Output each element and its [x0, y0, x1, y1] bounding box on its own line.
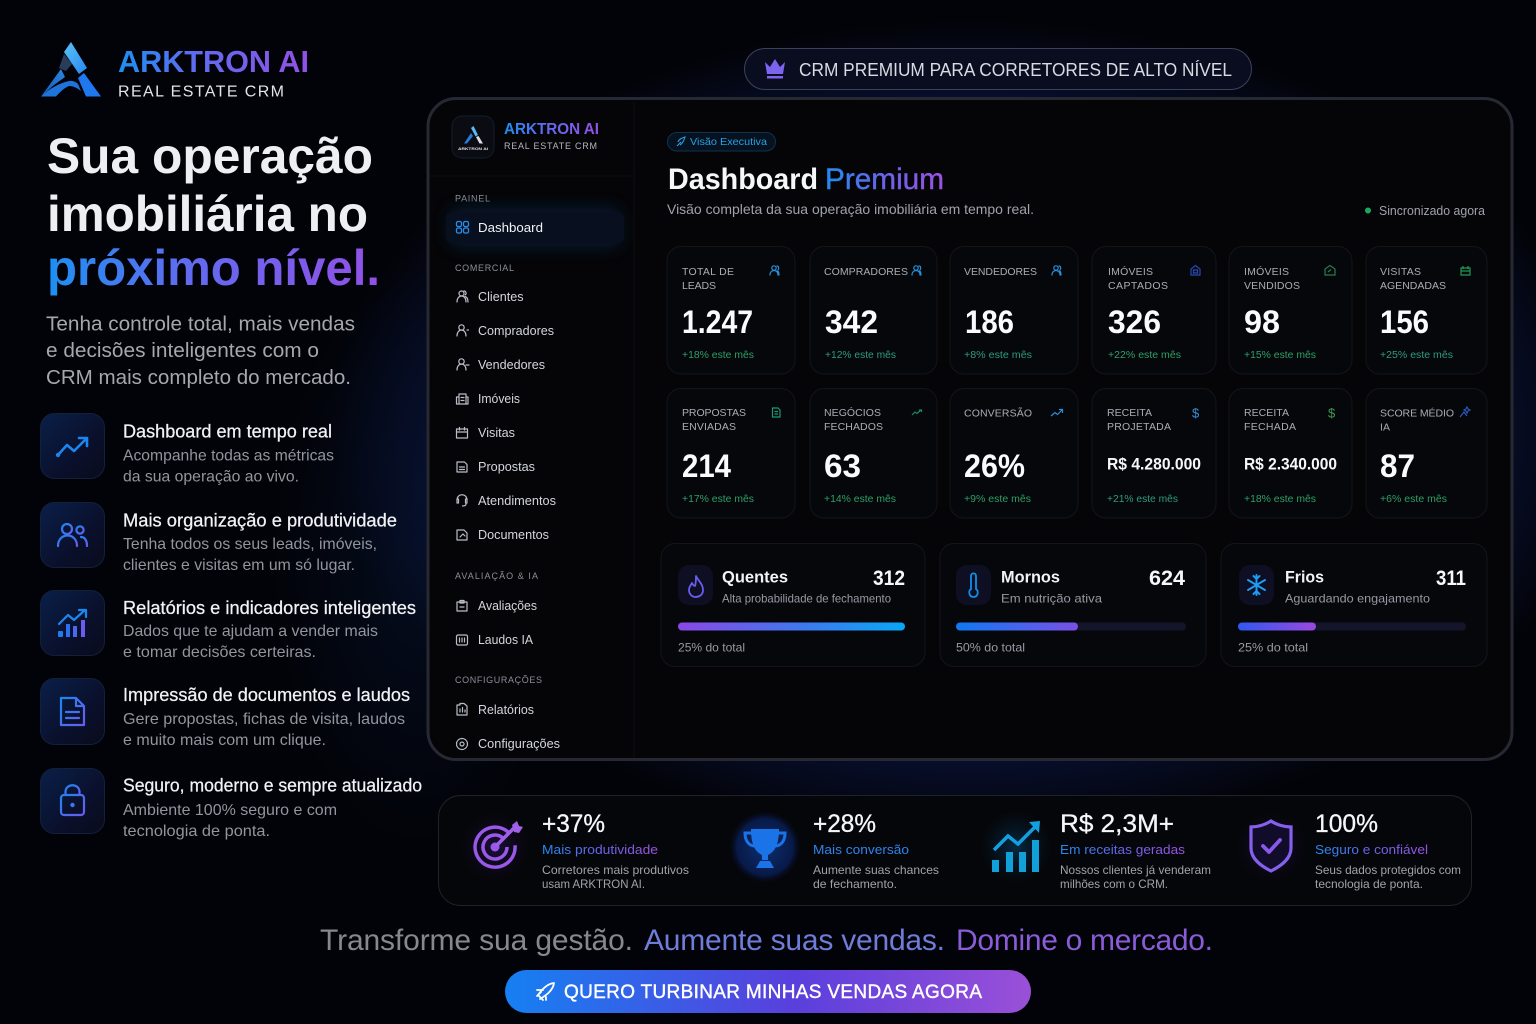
feature: security: tecnologia de ponta. [123, 823, 270, 840]
card: mornos: Mornos [1001, 568, 1060, 586]
section: painel: PAINEL [455, 194, 490, 204]
stat: conversao: de fechamento. [813, 877, 897, 891]
main header [667, 132, 1485, 218]
card: compradores: +12% este mês [825, 350, 896, 361]
icon: crown [765, 59, 785, 78]
card: visitas agendadas: VISITAS [1380, 266, 1421, 278]
card: visitas agendadas: +25% este mês [1380, 350, 1453, 361]
nav: laudos: Laudos IA [478, 632, 533, 647]
card: mornos: Em nutrição ativa [1001, 592, 1102, 606]
closing tagline: Aumente suas vendas. [644, 924, 945, 957]
card: vendedores: 186 [965, 304, 1014, 340]
nav: visitas [456, 425, 515, 440]
sidebar logo: ARKTRON AI [504, 121, 599, 138]
active item: dashboard [446, 208, 624, 247]
stat: seguranca: 100% [1315, 810, 1378, 838]
dashboard title: Dashboard [668, 163, 818, 196]
nav: clientes: Clientes [478, 289, 524, 304]
dashboard subtitle: Visão completa da sua operação imobiliária em tempo real. [667, 201, 1034, 217]
card: imoveis vendidos: +15% este mês [1244, 350, 1316, 361]
active item: dashboard: Dashboard [478, 220, 543, 235]
card: imoveis captados: CAPTADOS [1108, 280, 1168, 292]
stat: receitas: milhões com o CRM. [1060, 877, 1168, 891]
icon: trophy [730, 812, 800, 882]
KPI cards [667, 246, 1487, 518]
stat: seguranca [1235, 810, 1461, 891]
feature list [40, 414, 422, 840]
card: mornos: 624 [1149, 567, 1185, 590]
stat: receitas: Nossos clientes já venderam [1060, 863, 1211, 877]
card: frios: Frios [1285, 568, 1324, 586]
card: imoveis captados [1092, 246, 1216, 374]
card: visitas agendadas [1366, 246, 1487, 374]
closing tagline: Domine o mercado. [956, 924, 1213, 957]
card: frios [1221, 544, 1487, 666]
card: compradores: 342 [825, 304, 878, 340]
sync status: Sincronizado agora [1379, 204, 1485, 218]
headline: Sua operação [47, 128, 373, 184]
card: total de leads: TOTAL DE [682, 266, 734, 278]
card: quentes [661, 544, 925, 666]
feature: dashboard: Dashboard em tempo real [123, 422, 332, 442]
nav: avaliacoes: Avaliações [478, 598, 537, 613]
card: imoveis captados: +22% este mês [1108, 350, 1181, 361]
card: quentes: 25% do total [678, 640, 745, 654]
card: imoveis captados: IMÓVEIS [1108, 265, 1153, 278]
stat: receitas: R$ 2,3M+ [1060, 810, 1174, 838]
feature: security: Ambiente 100% seguro e com [123, 802, 337, 819]
feature: organization [40, 502, 397, 574]
card: receita projetada: RECEITA [1107, 407, 1152, 419]
brand tagline: REAL ESTATE CRM [118, 84, 284, 100]
feature: dashboard: da sua operação ao vivo. [123, 468, 299, 486]
stat: receitas: Em receitas geradas [1060, 842, 1186, 857]
card: receita projetada: +21% este mês [1107, 494, 1178, 505]
section: configuracoes: CONFIGURAÇÕES [455, 675, 542, 685]
card: imoveis vendidos: VENDIDOS [1244, 280, 1300, 292]
card: conversao: CONVERSÃO [964, 406, 1032, 420]
headline: imobiliária no [47, 186, 368, 242]
feature: documents [40, 678, 410, 749]
feature: documents: Impressão de documentos e laudos [123, 685, 410, 705]
nav: documentos: Documentos [478, 527, 549, 542]
sidebar logo: ARKTRON AI [458, 147, 488, 151]
card: receita projetada: $ [1192, 406, 1200, 420]
card: compradores [810, 246, 937, 374]
nav: relatorios: Relatórios [478, 702, 534, 717]
card: total de leads [667, 246, 795, 374]
nav: laudos [456, 632, 533, 647]
card: score medio ia [1366, 388, 1487, 518]
closing tagline [320, 924, 1213, 957]
logo: Arktron AI [41, 42, 309, 100]
card: conversao: +9% este mês [964, 494, 1031, 505]
card: receita fechada: +18% este mês [1244, 494, 1316, 505]
card: receita projetada [1092, 388, 1216, 518]
card: receita projetada: PROJETADA [1107, 421, 1171, 433]
card: visitas agendadas: AGENDADAS [1380, 280, 1446, 292]
premium badge [744, 48, 1252, 90]
icon: shield [1235, 811, 1307, 883]
card: propostas enviadas: +17% este mês [682, 494, 754, 505]
feature: security [40, 768, 422, 840]
card: propostas enviadas: ENVIADAS [682, 421, 736, 433]
icon: growth chart [980, 811, 1052, 883]
card: mornos [940, 544, 1206, 666]
card: conversao [950, 388, 1078, 518]
feature: security: Seguro, moderno e sempre atualizado [123, 776, 422, 796]
nav: compradores: Compradores [478, 323, 554, 338]
card: vendedores [950, 246, 1078, 374]
card: imoveis vendidos [1229, 246, 1352, 374]
dashboard title: Premium [825, 163, 944, 196]
card: score medio ia: IA [1380, 422, 1390, 434]
stat: produtividade: usam ARKTRON AI. [542, 877, 645, 891]
stat: produtividade [459, 810, 689, 891]
feature: documents: e muito mais com um clique. [123, 732, 326, 749]
stat: conversao: +28% [813, 810, 876, 838]
feature: organization: Tenha todos os seus leads, imóveis, [123, 536, 377, 553]
card: propostas enviadas: 214 [682, 448, 731, 484]
card: negocios fechados: NEGÓCIOS [824, 406, 881, 419]
feature: reports: Dados que te ajudam a vender mais [123, 623, 378, 640]
card: receita fechada: R$ 2.340.000 [1244, 454, 1337, 474]
subtitle: Tenha controle total, mais vendas [46, 314, 355, 336]
card: quentes: 312 [873, 567, 905, 590]
subtitle [46, 314, 355, 389]
stat: produtividade: Corretores mais produtivos [542, 863, 689, 877]
stat: conversao: Mais conversão [813, 842, 909, 857]
card: visitas agendadas: 156 [1380, 304, 1429, 340]
card: imoveis vendidos: IMÓVEIS [1244, 265, 1289, 278]
card: imoveis vendidos: 98 [1244, 304, 1280, 340]
card: negocios fechados [810, 388, 937, 518]
card: vendedores: +8% este mês [964, 350, 1032, 361]
nav: configuracoes: Configurações [478, 736, 560, 751]
card: total de leads: +18% este mês [682, 350, 754, 361]
sidebar [446, 116, 624, 751]
closing tagline: Transforme sua gestão. [320, 924, 633, 957]
nav: imoveis [456, 391, 520, 406]
sidebar logo: REAL ESTATE CRM [504, 141, 597, 151]
nav: atendimentos: Atendimentos [478, 493, 556, 508]
icon: rocket [537, 983, 554, 1000]
tag: visao executiva [668, 132, 776, 151]
card: quentes: Alta probabilidade de fechamento [722, 592, 891, 606]
card: propostas enviadas: PROPOSTAS [682, 407, 746, 419]
section: avaliacao: AVALIAÇÃO & IA [455, 571, 538, 581]
tag: visao executiva: Visão Executiva [690, 136, 767, 148]
nav: visitas: Visitas [478, 425, 515, 440]
card: quentes: Quentes [722, 568, 788, 586]
stat: conversao [730, 810, 939, 891]
feature: dashboard: Acompanhe todas as métricas [123, 448, 334, 464]
headline: próximo nível. [47, 240, 380, 296]
card: negocios fechados: FECHADOS [824, 421, 883, 433]
brand name: ARKTRON AI [118, 44, 309, 79]
card: receita fechada: $ [1328, 406, 1336, 420]
card: imoveis captados: 326 [1108, 304, 1161, 340]
nav: vendedores: Vendedores [478, 357, 545, 372]
card: mornos: 50% do total [956, 640, 1025, 654]
card: total de leads: 1.247 [682, 304, 753, 340]
stat: seguranca: tecnologia de ponta. [1315, 877, 1423, 891]
feature: documents: Gere propostas, fichas de visita, laudos [123, 711, 405, 728]
card: negocios fechados: 63 [824, 448, 861, 484]
stat: produtividade: Mais produtividade [542, 842, 658, 857]
subtitle: e decisões inteligentes com o [46, 340, 319, 362]
card: receita fechada: FECHADA [1244, 421, 1296, 433]
feature: organization: Mais organização e produtividade [123, 510, 397, 530]
card: frios: Aguardando engajamento [1285, 592, 1430, 606]
stat: seguranca: Seus dados protegidos com [1315, 863, 1461, 877]
card: receita fechada: RECEITA [1244, 407, 1289, 419]
call to action button [505, 970, 1031, 1013]
stat: seguranca: Seguro e confiável [1315, 842, 1428, 857]
call to action button: QUERO TURBINAR MINHAS VENDAS AGORA [564, 982, 982, 1003]
stat: produtividade: +37% [542, 810, 605, 838]
card: compradores: COMPRADORES [824, 266, 908, 278]
stat: receitas [980, 810, 1211, 891]
premium badge: CRM PREMIUM PARA CORRETORES DE ALTO NÍVEL [799, 60, 1232, 80]
feature: reports: e tomar decisões certeiras. [123, 644, 316, 661]
icon: target [459, 811, 531, 883]
dashboard panel [428, 98, 1512, 760]
feature: reports [40, 590, 416, 661]
card: total de leads: LEADS [682, 280, 716, 292]
card: propostas enviadas [667, 388, 795, 518]
card: negocios fechados: +14% este mês [824, 494, 896, 505]
dashboard title [668, 163, 944, 196]
card: receita fechada [1229, 388, 1352, 518]
card: score medio ia: +6% este mês [1380, 494, 1447, 505]
nav: imoveis: Imóveis [478, 391, 520, 406]
nav: propostas: Propostas [478, 459, 535, 474]
icon: logo A [41, 42, 101, 96]
card: frios: 25% do total [1238, 640, 1308, 654]
card: frios: 311 [1436, 567, 1466, 590]
sidebar logo [452, 116, 599, 158]
headline [47, 128, 380, 296]
card: conversao: 26% [964, 448, 1025, 484]
card: score medio ia: SCORE MÉDIO [1380, 406, 1454, 420]
feature: dashboard [40, 414, 334, 486]
subtitle: CRM mais completo do mercado. [46, 367, 351, 389]
lead temperature cards [661, 544, 1487, 666]
stats band [438, 796, 1472, 906]
feature: organization: clientes e visitas em um só lugar. [123, 557, 355, 574]
nav: clientes [457, 289, 524, 304]
card: receita projetada: R$ 4.280.000 [1107, 454, 1201, 474]
card: score medio ia: 87 [1380, 448, 1415, 484]
section: comercial: COMERCIAL [455, 263, 514, 273]
stat: conversao: Aumente suas chances [813, 863, 939, 877]
feature: reports: Relatórios e indicadores inteligentes [123, 598, 416, 618]
card: vendedores: VENDEDORES [964, 266, 1037, 278]
